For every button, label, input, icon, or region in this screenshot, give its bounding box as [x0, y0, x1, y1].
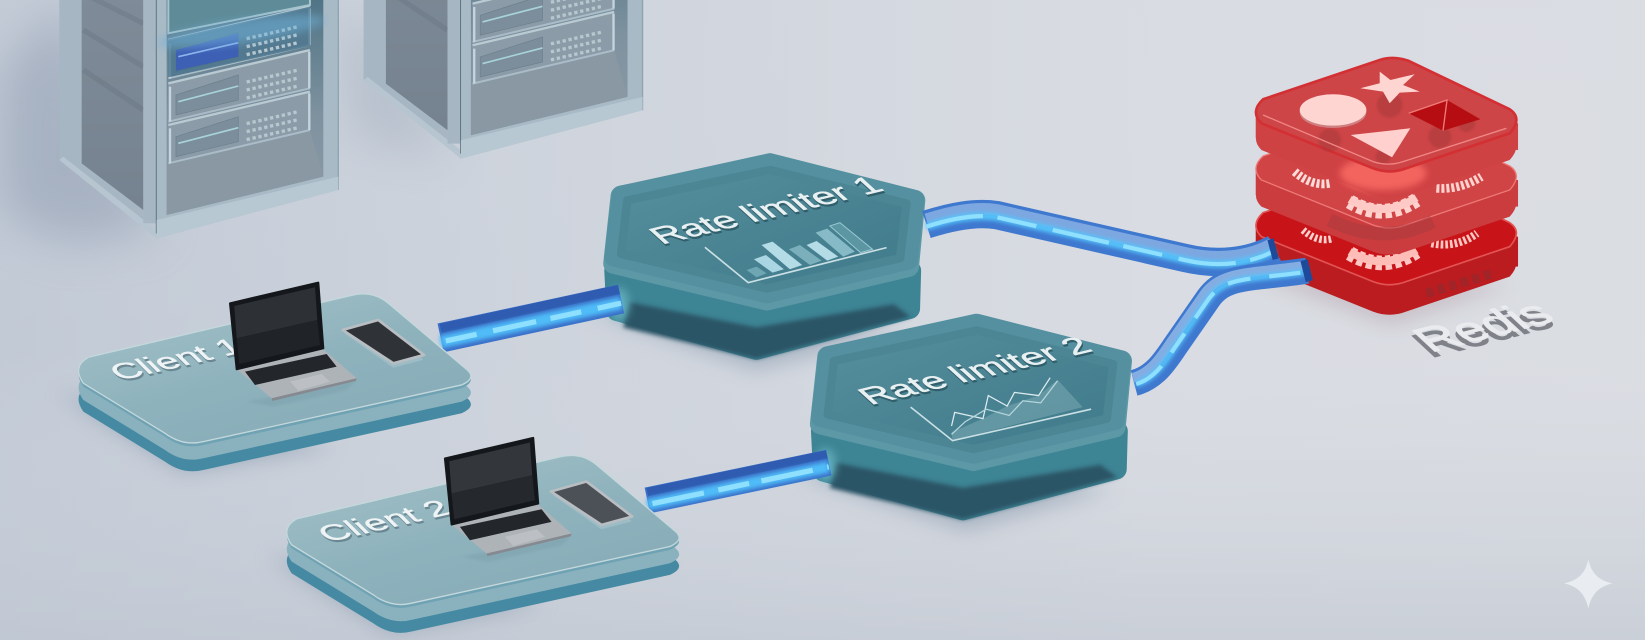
label: Rate limiter 2: Rate limiter 2 [851, 332, 1100, 410]
label: Redis: Redis [1402, 294, 1565, 359]
label: Client 1: Client 1 [104, 336, 251, 387]
rate limiter 1 node [608, 163, 915, 359]
pipe: client 2 to rate limiter 2 [647, 454, 829, 505]
icon: phone 2 [551, 482, 632, 528]
server rack 1 [59, 0, 338, 238]
glow in centre of stack [1340, 155, 1426, 192]
square shape [1409, 100, 1480, 131]
icon: laptop 1 [230, 283, 357, 407]
chart: bars [705, 223, 887, 283]
star shape [1360, 72, 1420, 103]
server rack 2 [364, 0, 643, 159]
dark gear pattern inside top layer [1318, 92, 1475, 164]
icon: phone 1 [343, 320, 424, 367]
chart: area lines [911, 378, 1091, 441]
server unit 1 of rack 1 [168, 0, 310, 33]
label: Client 2: Client 2 [312, 498, 460, 549]
label: Redis: Redis [1402, 299, 1565, 365]
middle layer [1256, 115, 1518, 255]
redis stack [1256, 58, 1518, 315]
client 2 platform [287, 438, 679, 633]
pipe: client 1 to rate limiter 1 [441, 290, 621, 342]
blue panel on server unit 2 [168, 7, 310, 77]
pipe: rate limiter 1 to redis [926, 209, 1276, 264]
label: Rate limiter 1: Rate limiter 1 [642, 172, 891, 249]
gears in middle layer [1295, 172, 1481, 234]
rate limiter 2 node [815, 323, 1121, 519]
blue light glow on rack 1 [157, 8, 326, 55]
label: Rate limiter 2: Rate limiter 2 [852, 334, 1101, 412]
gears in bottom layer [1303, 230, 1493, 293]
body of hexagon 1 [608, 236, 911, 359]
lower glass plate of client 1 [79, 311, 471, 471]
label: Rate limiter 1: Rate limiter 1 [643, 174, 892, 251]
label: Client 1: Client 1 [103, 334, 250, 385]
lower glass plate of client 2 [287, 472, 679, 633]
top face of hexagon 2 [820, 323, 1121, 461]
top face of hexagon 1 [614, 163, 915, 300]
triangle shape [1351, 128, 1410, 157]
top layer [1256, 58, 1518, 198]
bottom layer [1256, 171, 1518, 315]
icon: sparkle watermark [1564, 559, 1612, 609]
upper glass plate of client 1 [79, 294, 471, 446]
upper glass plate of client 2 [287, 455, 679, 608]
pipe: rate limiter 2 to redis [1133, 260, 1309, 384]
body of hexagon 2 [815, 397, 1117, 519]
circle shape [1300, 94, 1366, 128]
client 1 platform [79, 283, 471, 471]
icon: laptop 2 [445, 438, 572, 562]
label: Client 2: Client 2 [311, 496, 458, 547]
